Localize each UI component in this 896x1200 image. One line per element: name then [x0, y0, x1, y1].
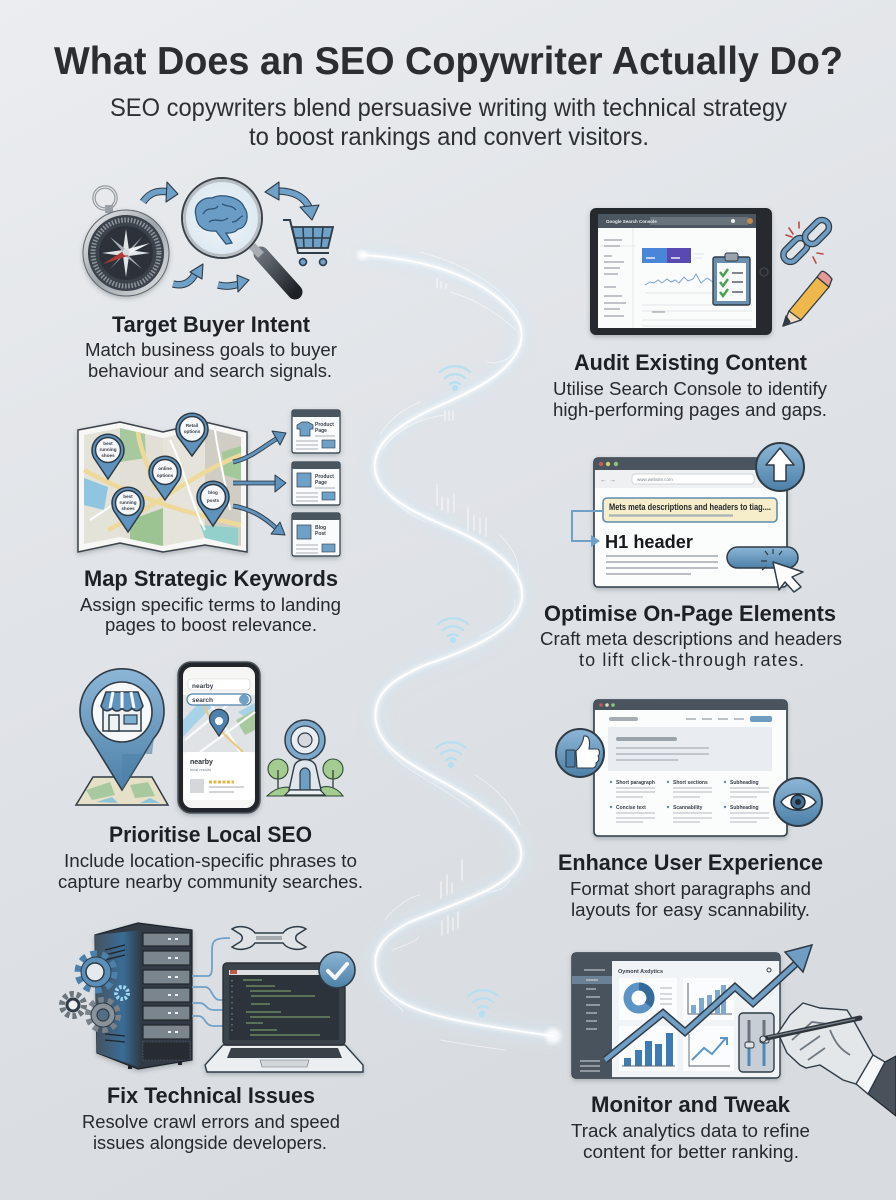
arrow: meta to header	[572, 511, 603, 547]
pin labels: best	[123, 494, 133, 499]
icon: smartphone with map search: local results	[190, 767, 211, 772]
heading: Target Buyer Intent	[112, 312, 311, 337]
icon: web layout: Scannability	[673, 805, 703, 811]
arrows to landing pages	[233, 431, 286, 535]
subtitle: to boost rankings and convert visitors.	[249, 123, 649, 151]
icon: web layout	[594, 700, 787, 836]
icon: analytics dashboard	[572, 953, 780, 1078]
description: Assign specific terms to landing	[80, 595, 341, 615]
panel: enhance user experience	[556, 700, 823, 920]
description	[85, 340, 337, 381]
icon: smartphone with map search: nearby	[192, 683, 214, 690]
description: Resolve crawl errors and speed	[82, 1112, 340, 1132]
subtitle: SEO copywriters blend persuasive writing with technical strategy	[110, 94, 787, 122]
icon: landmark monument	[267, 720, 343, 796]
heading: Fix Technical Issues	[107, 1083, 315, 1108]
icon: magnifying glass with brain	[182, 178, 295, 292]
icon: upward arrow badge	[756, 443, 804, 491]
icon: web layout: Concise text	[616, 805, 646, 811]
icon: web layout: Subheading	[730, 805, 759, 811]
icon: growth arrow	[605, 945, 812, 1060]
heading: Audit Existing Content	[574, 350, 808, 375]
icon: browser window: www.website.com	[637, 477, 673, 482]
icon: flow arrows	[143, 182, 319, 292]
icon: server rack	[95, 923, 192, 1069]
panel: prioritise local seo	[58, 662, 363, 892]
panel: fix technical issues	[62, 923, 363, 1153]
icon: clipboard checklist	[713, 253, 750, 305]
panel: optimise on-page elements	[540, 443, 842, 670]
icon: compass	[83, 187, 169, 296]
pin labels: blog	[208, 490, 218, 495]
description: layouts for easy scannability.	[571, 900, 810, 920]
description	[553, 379, 827, 420]
small data bars along ribbon	[437, 279, 486, 935]
icon: tablet dashboard	[590, 208, 772, 335]
panel: audit existing content	[553, 208, 832, 420]
description: pages to boost relevance.	[105, 615, 317, 635]
description: capture nearby community searches.	[58, 872, 363, 892]
heading: Map Strategic Keywords	[84, 566, 338, 591]
description	[540, 629, 842, 670]
cta button and cursor	[727, 547, 803, 592]
icon: tablet dashboard: Google Search Console	[606, 219, 657, 224]
icon: smartphone with map search: search	[192, 697, 213, 704]
subtitle	[110, 94, 787, 151]
icon: hand adjusting slider	[760, 1003, 896, 1116]
meta description highlight: Mets meta descriptions and headers to tiag....	[609, 502, 771, 513]
icon: laptop with code	[205, 952, 363, 1072]
icon: analytics dashboard: Oymont Axdytics	[618, 969, 663, 975]
icon: web layout: Short paragraph	[616, 780, 655, 786]
icon: thumbs up badge	[556, 729, 604, 777]
heading: Prioritise Local SEO	[109, 822, 312, 847]
icon: shopping cart	[283, 220, 333, 266]
description: Utilise Search Console to identify	[553, 379, 827, 399]
description	[58, 851, 363, 892]
description: high-performing pages and gaps.	[553, 400, 827, 420]
icon: keyword pins	[92, 413, 229, 532]
landing page cards: Page	[315, 428, 327, 434]
landing page cards	[292, 410, 340, 556]
description	[80, 595, 341, 635]
landing page cards: Product	[315, 422, 334, 428]
landing page cards: Post	[315, 531, 326, 537]
icon: browser window: ← →	[600, 477, 616, 484]
description: Track analytics data to refine	[571, 1121, 810, 1141]
description	[82, 1112, 340, 1153]
glowing central ribbon	[362, 252, 553, 1050]
icon: smartphone with map search	[178, 662, 260, 813]
icon: web layout: Subheading	[730, 780, 759, 786]
title: What Does an SEO Copywriter Actually Do?	[54, 40, 843, 83]
icon: pencil	[783, 271, 832, 326]
h1 label: H1 header	[605, 531, 693, 552]
text lines	[606, 556, 718, 574]
icon: gears	[62, 955, 128, 1029]
description: Match business goals to buyer	[85, 340, 337, 360]
icon: eye badge	[774, 778, 822, 826]
pin labels: options	[184, 429, 201, 434]
landing page cards: Blog	[315, 525, 326, 531]
icon: smartphone with map search: nearby	[190, 759, 213, 766]
icon: folded map	[78, 422, 247, 552]
pin labels: online	[158, 466, 172, 471]
heading: Optimise On-Page Elements	[544, 601, 836, 626]
ribbon end flare	[357, 250, 561, 1044]
icon: browser window	[594, 458, 787, 587]
pin labels: running	[99, 447, 117, 452]
description: issues alongside developers.	[93, 1133, 327, 1153]
pin labels: shoes	[121, 506, 135, 511]
wi-fi signal icons	[436, 366, 498, 1016]
heading: Monitor and Tweak	[591, 1092, 791, 1117]
pin labels: Retail	[186, 423, 198, 428]
icon: cables	[192, 938, 230, 1026]
landing page cards: Product	[315, 474, 334, 480]
description: to lift click-through rates.	[579, 650, 804, 670]
description: behaviour and search signals.	[88, 361, 332, 381]
icon: web layout: Short sections	[673, 780, 708, 786]
pin labels: best	[103, 441, 113, 446]
icon: storefront map pin	[76, 669, 168, 805]
description: Format short paragraphs and	[570, 879, 811, 899]
panel: monitor and tweak	[571, 945, 896, 1162]
description: content for better ranking.	[583, 1142, 799, 1162]
pin labels: shoes	[101, 453, 115, 458]
description: Craft meta descriptions and headers	[540, 629, 842, 649]
panel: map strategic keywords	[78, 410, 341, 635]
landing page cards: Page	[315, 480, 327, 486]
pin labels: options	[157, 473, 174, 478]
description	[571, 1121, 810, 1162]
panel: target buyer intent	[83, 178, 337, 381]
pin labels: running	[119, 500, 137, 505]
icon: broken chain link	[781, 217, 832, 265]
heading: Enhance User Experience	[558, 850, 823, 875]
meta description highlight	[603, 498, 777, 522]
pin labels	[99, 423, 220, 511]
description: Include location-specific phrases to	[64, 851, 357, 871]
icon: wrench	[232, 927, 306, 949]
pin labels: posts	[207, 498, 220, 503]
description	[570, 879, 811, 920]
icon: slider control panel	[739, 1013, 774, 1072]
